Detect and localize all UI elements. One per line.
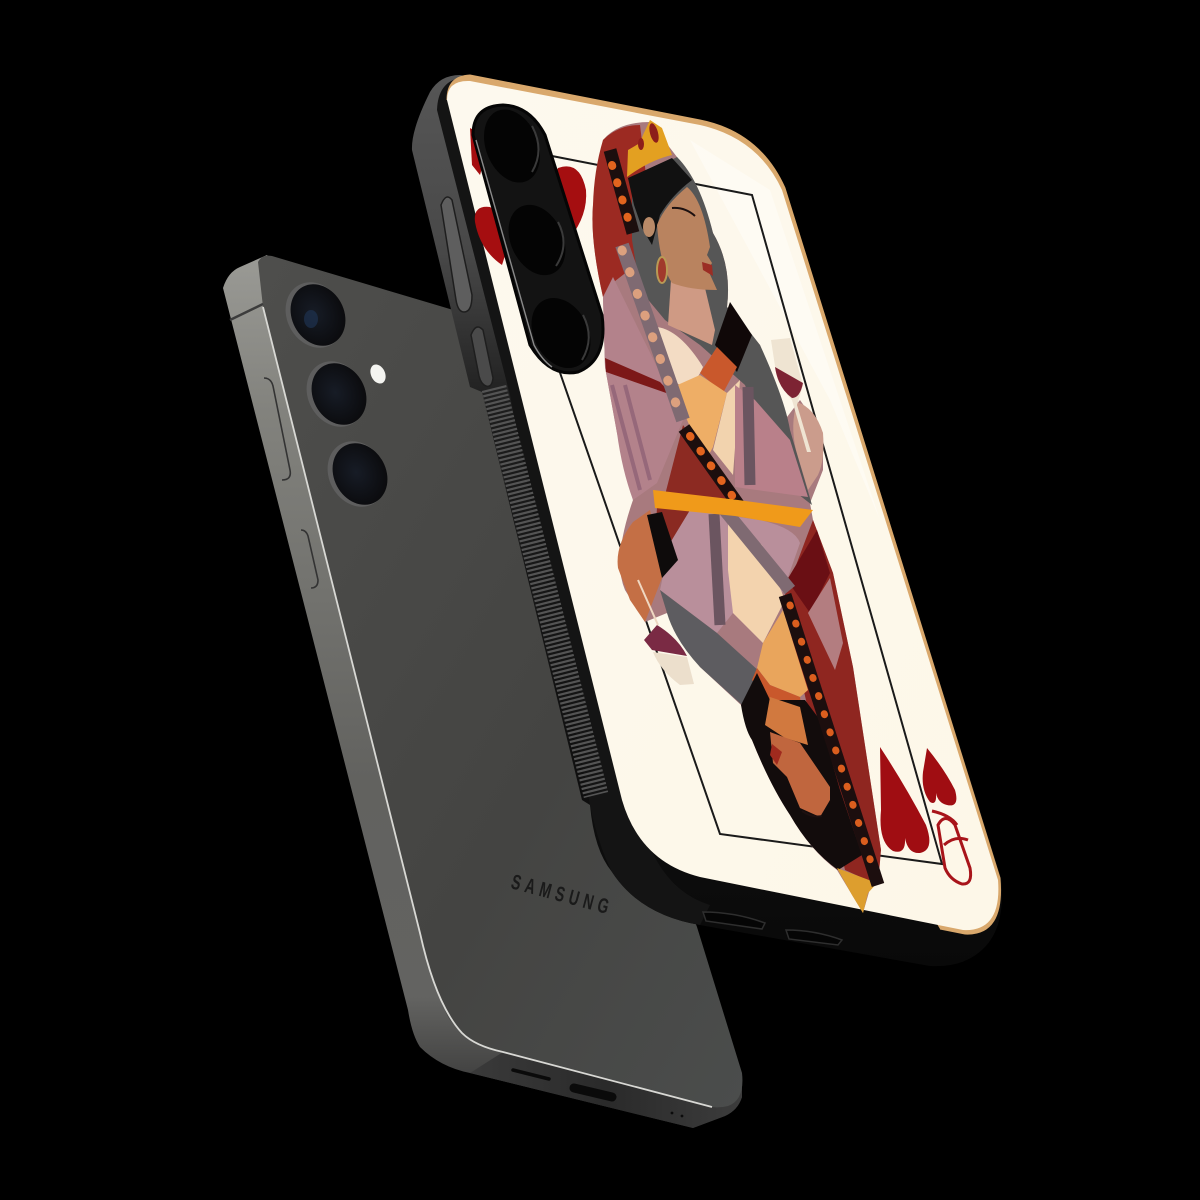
top heart right	[548, 166, 586, 238]
brand wordmark: SAMSUNG	[509, 870, 611, 918]
hair top black	[628, 158, 692, 245]
lower red skirt	[665, 425, 740, 505]
bottom small heart	[923, 748, 956, 805]
top heart left	[475, 207, 510, 265]
grip ridges	[494, 388, 596, 795]
usb port	[574, 1088, 612, 1097]
case body	[412, 75, 1002, 966]
wine glass bottom	[638, 580, 694, 685]
phone back face	[258, 256, 742, 1107]
frame seam	[230, 304, 263, 320]
bottom big heart	[880, 747, 929, 853]
microphone holes	[671, 1112, 683, 1117]
case port right	[786, 930, 842, 945]
phone bottom edge	[470, 1052, 742, 1128]
lower mauve panel	[660, 510, 800, 643]
lower face	[770, 732, 830, 817]
camera island	[473, 101, 603, 378]
top heart small	[470, 128, 490, 175]
hair mass	[632, 157, 812, 505]
camera lens 3	[316, 431, 398, 517]
cutout glint 2	[556, 222, 564, 266]
eye	[672, 208, 695, 216]
lower crown	[837, 868, 877, 913]
veil folds	[612, 385, 650, 490]
belt	[653, 490, 813, 527]
lower eye	[802, 811, 822, 816]
camera cutout 2	[497, 195, 577, 285]
pink dress right	[735, 385, 808, 497]
lower vertical border	[714, 514, 720, 625]
wine glass top	[771, 338, 811, 452]
case inner bezel	[437, 78, 710, 925]
dark red diamond	[787, 530, 830, 613]
lower grey hair	[660, 590, 760, 705]
sash black strip middle	[684, 428, 740, 507]
metal highlight line	[263, 307, 712, 1107]
lips	[702, 262, 713, 276]
lower lips	[770, 744, 782, 765]
hand	[793, 402, 823, 490]
volume button	[441, 197, 472, 312]
lower sash black	[785, 595, 878, 885]
orange skin	[700, 347, 737, 393]
lower gold	[757, 610, 808, 697]
lower red drape	[783, 520, 881, 885]
case port left	[703, 912, 765, 929]
sash pale border	[622, 245, 683, 420]
island highlight	[476, 140, 552, 367]
grey phone back view	[223, 255, 742, 1128]
printed plate	[447, 81, 998, 930]
black sleeve	[647, 512, 678, 578]
side button slit	[264, 378, 290, 480]
left red skirt	[655, 507, 690, 575]
chest light	[655, 327, 703, 385]
sash flowers upper	[612, 165, 632, 232]
sash pale flowers	[622, 250, 680, 415]
neck	[668, 280, 715, 345]
speaker grille	[513, 1070, 549, 1079]
hair black band	[715, 302, 752, 372]
face	[657, 187, 717, 290]
phone side frame	[223, 255, 742, 1128]
sash flowers middle	[690, 436, 738, 504]
plate glare	[690, 140, 880, 520]
cutout glint 1	[532, 126, 538, 172]
power button	[471, 327, 493, 386]
top crown	[627, 120, 672, 177]
pale mauve patch	[808, 578, 843, 670]
lower sash flowers	[790, 605, 875, 875]
gold rim	[447, 75, 1001, 934]
camera cutout 1	[474, 101, 550, 191]
earring	[657, 257, 667, 283]
lower sash pale	[723, 508, 790, 590]
left arm	[618, 510, 665, 622]
gold blouse	[673, 375, 727, 462]
mid red band	[605, 358, 672, 395]
cream blouse	[713, 380, 740, 475]
phone with printed case	[412, 75, 1002, 966]
top red veil	[592, 125, 655, 297]
lower neck	[765, 697, 808, 745]
figure base silhouette	[592, 122, 881, 913]
camera lens 1	[274, 272, 356, 358]
veil mauve	[603, 277, 683, 500]
ear	[643, 217, 655, 237]
letter Q	[932, 811, 971, 884]
card frame	[480, 142, 942, 864]
lower black hair	[741, 673, 862, 870]
cutout glint 3	[582, 315, 589, 360]
lower orange	[752, 668, 802, 710]
side button slit lower	[301, 530, 318, 588]
camera cutout 3	[520, 288, 602, 378]
camera lens 2	[295, 351, 377, 437]
vertical border	[748, 387, 750, 485]
card artwork	[470, 120, 971, 913]
lower skin gold	[728, 520, 785, 643]
flash	[367, 362, 389, 386]
sash black strip upper	[610, 150, 633, 233]
